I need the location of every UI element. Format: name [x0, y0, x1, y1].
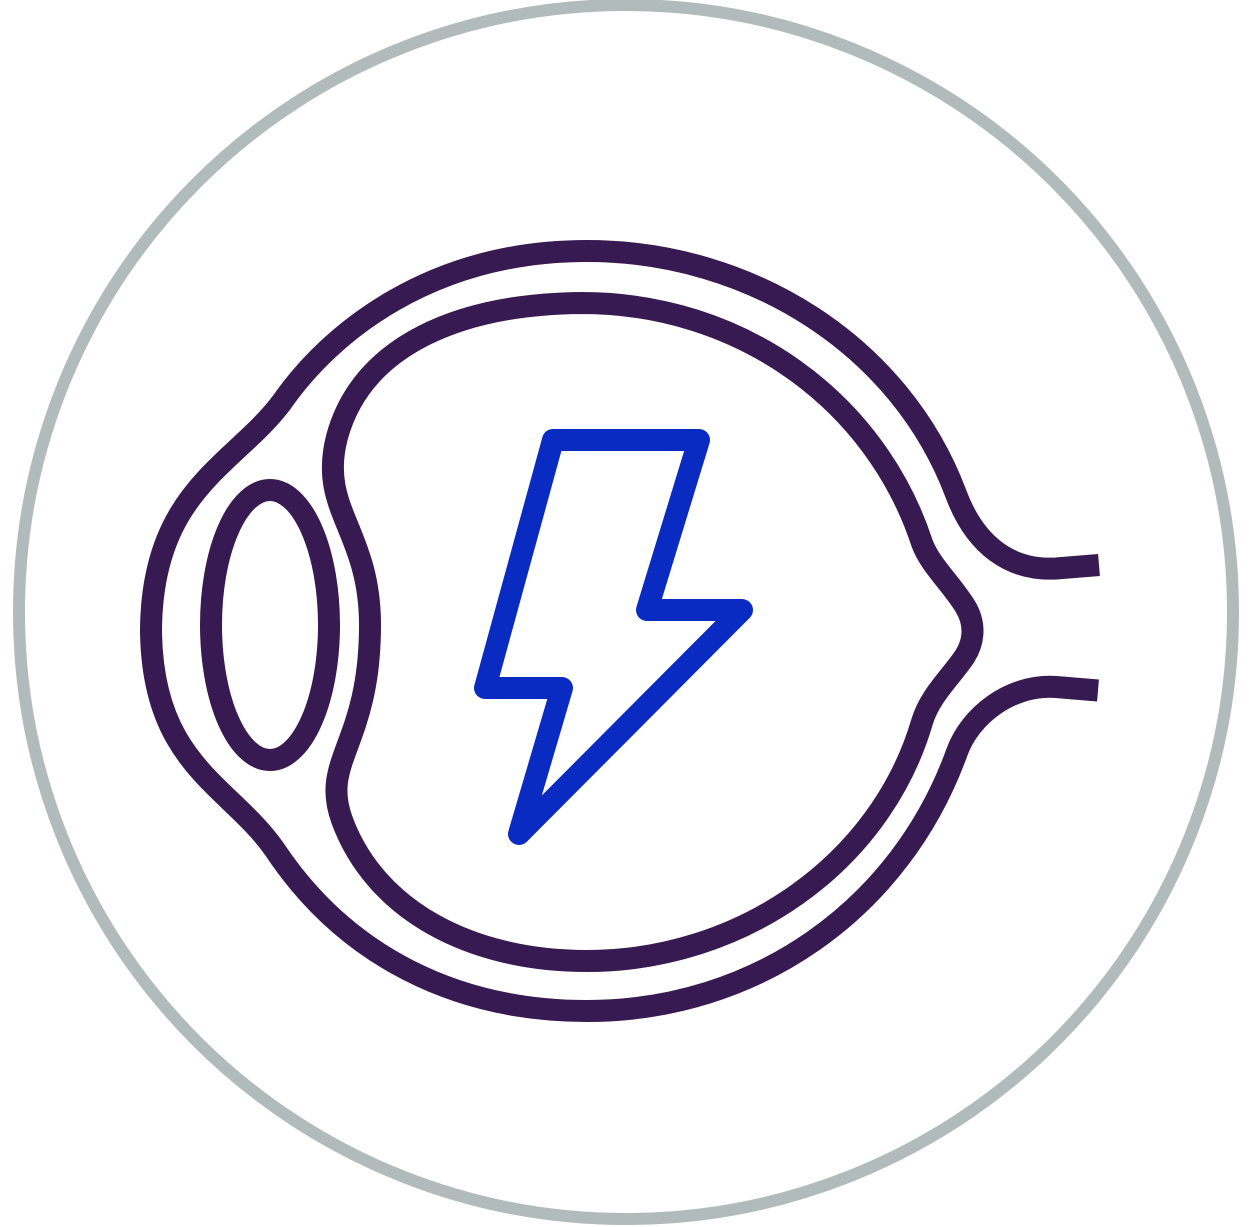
lens [211, 490, 329, 760]
eye outer wall [151, 251, 1099, 1011]
icon: lightning bolt [485, 440, 742, 834]
eye inner chamber [333, 303, 973, 961]
eye outline [151, 251, 1099, 1011]
